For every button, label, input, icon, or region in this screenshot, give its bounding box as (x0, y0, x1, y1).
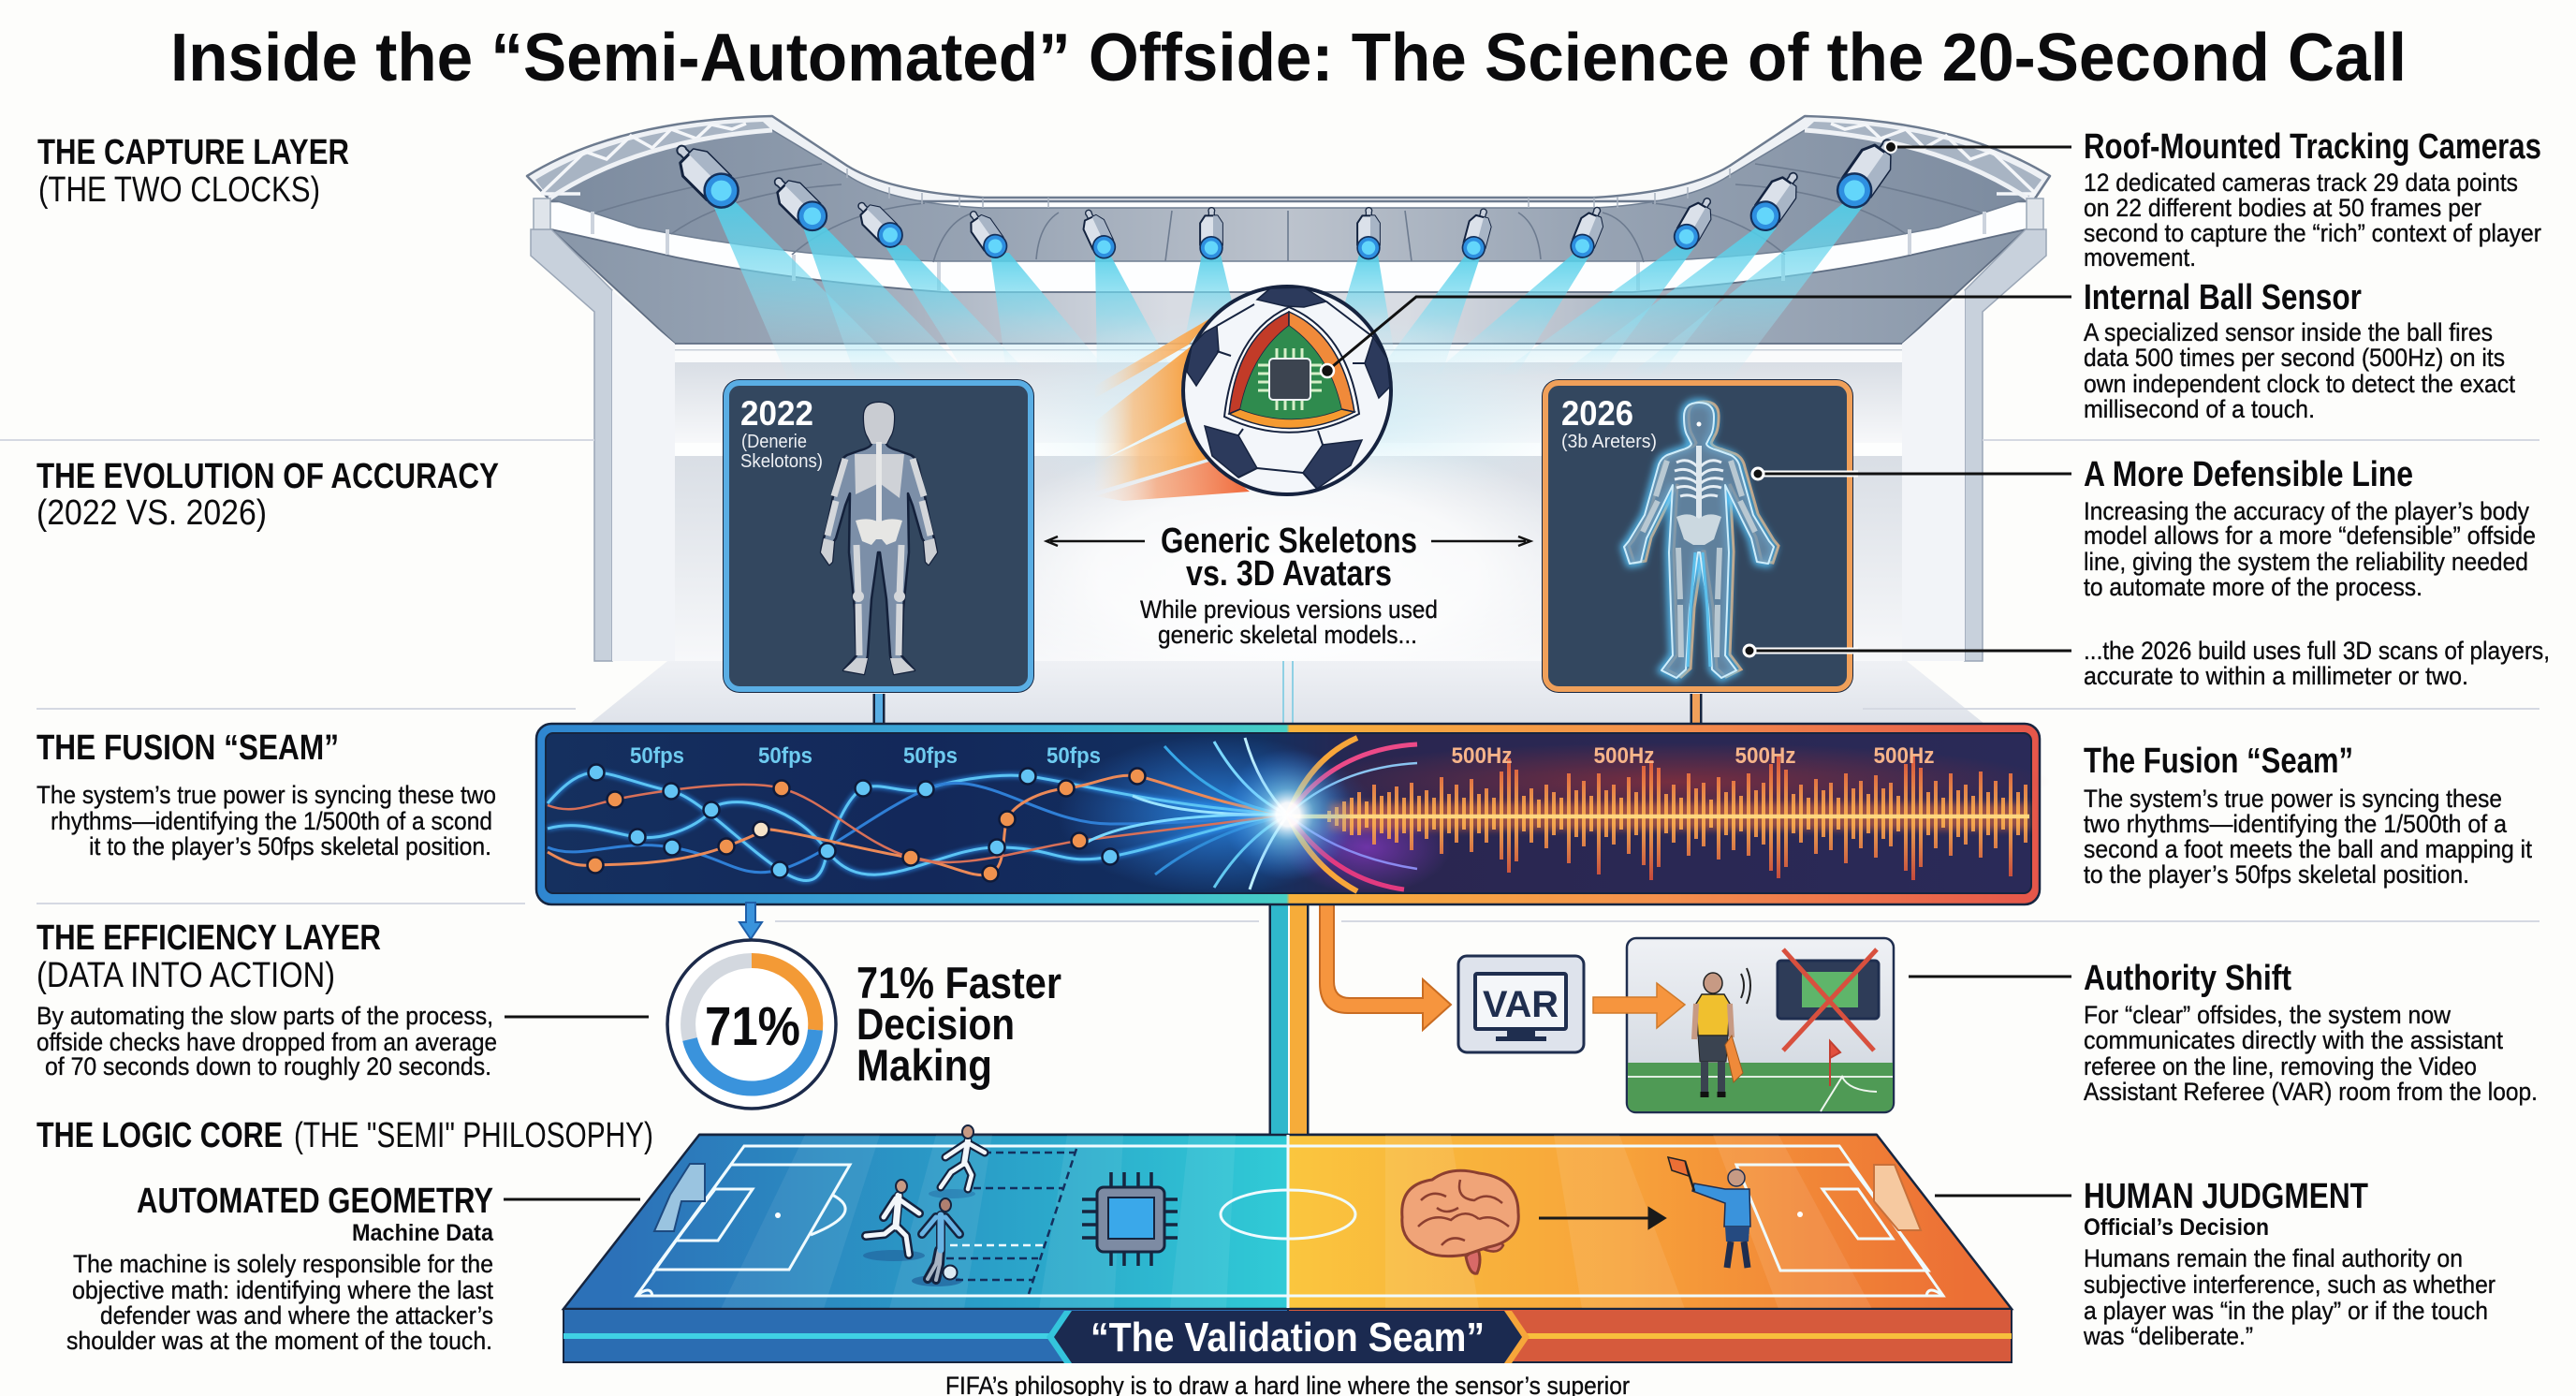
camera 12 (1831, 131, 1903, 213)
text: the fusion seam (right): second a foot meets the ball and mapping it (2084, 835, 2532, 863)
flash at seam (1222, 749, 1354, 880)
seam vertical bars (699, 899, 1877, 1137)
text: the fusion seam (left): rhythms—identifying the 1/500th of a scond (51, 807, 492, 835)
plaque: the validation seam: “The Validation Seam” (1090, 1315, 1485, 1360)
panel: fusion seam visual (536, 724, 2050, 904)
connector 2022 (875, 694, 883, 727)
label: 3D avatars: (3b Areters) (1561, 432, 1657, 452)
pitch markings (637, 1135, 1943, 1309)
text: the efficiency layer: (DATA INTO ACTION) (37, 956, 335, 995)
text: internal ball sensor: own independent clock to detect the exact (2084, 370, 2515, 398)
arrow: brain to official (1539, 1209, 1664, 1227)
text: roof-mounted tracking cameras: 12 dedicated cameras track 29 data points (2084, 169, 2518, 197)
text: the fusion seam (right): The system’s true power is syncing these (2084, 785, 2502, 813)
text: human judgment: subjective interference, such as whether (2084, 1271, 2496, 1299)
labels: 50fps: 50fps (903, 743, 958, 769)
text: 2026 build note: accurate to within a millimeter or two. (2084, 662, 2468, 690)
label: 2026: 2026 (1561, 394, 1633, 433)
connector 2026 (1692, 694, 1700, 727)
figure: attacker upper (941, 1125, 985, 1189)
camera 10 (1670, 193, 1719, 253)
camera 5 (1076, 206, 1119, 262)
text: internal ball sensor: A specialized sensor inside the ball fires (2084, 318, 2493, 346)
label: generic skeletons: Skelotons) (740, 451, 823, 472)
camera 7 (1357, 208, 1380, 259)
text: automated geometry: defender was and where the attacker’s (100, 1301, 493, 1330)
text: authority shift: referee on the line, removing the Video (2084, 1052, 2477, 1080)
text: the efficiency layer: THE EFFICIENCY LAYER (37, 918, 381, 958)
text: human judgment: a player was “in the play” or if the touch (2084, 1297, 2488, 1325)
text: human judgment (2083, 1177, 2496, 1350)
icon: football with sensor chip (1183, 287, 1391, 494)
camera 2 (766, 169, 832, 236)
figure: assistant referee (1694, 968, 1750, 1097)
text: a more defensible line: to automate more of the process. (2084, 573, 2422, 601)
camera 8 (1460, 206, 1495, 261)
pitch right half: human (1288, 1135, 2012, 1309)
panel: 2022 generic skeleton (723, 379, 1034, 693)
player shadows (863, 1250, 925, 1261)
text: a more defensible line (2084, 455, 2536, 601)
labels: 50fps (630, 743, 1101, 769)
arrow: to 2026 panel (1431, 536, 1530, 546)
text: internal ball sensor: data 500 times per second (500Hz) on its (2084, 344, 2505, 372)
nodes: camera frames (588, 764, 1146, 882)
icon: brain (1402, 1170, 1518, 1273)
text: human judgment: HUMAN JUDGMENT (2084, 1177, 2368, 1216)
offside line and dashed projections (946, 1149, 1076, 1294)
text: the efficiency layer (37, 918, 497, 1080)
text: automated geometry: objective math: identifying where the last (72, 1276, 493, 1304)
burst: converging lines at seam (1086, 738, 1417, 891)
heading: the capture layer: THE CAPTURE LAYER (37, 133, 349, 172)
connectors: panels to fusion bar (879, 694, 1696, 727)
labels: 50fps: 50fps (758, 743, 812, 769)
camera 9 (1568, 203, 1608, 261)
camera 6 (1200, 208, 1222, 259)
heading: the logic core: THE LOGIC CORE (37, 1116, 283, 1155)
waves: 50fps (548, 772, 1288, 881)
text: 71% faster decision making: 71% Faster (856, 958, 1061, 1007)
text: a more defensible line: model allows for a more “defensible” offside (2084, 522, 2536, 550)
text: authority shift: Authority Shift (2084, 959, 2291, 998)
text: authority shift: communicates directly with the assistant (2084, 1026, 2503, 1054)
panel: pitch, the logic core (564, 1125, 2012, 1363)
text: the fusion seam (right): The Fusion “Seam” (2084, 742, 2353, 781)
text: authority shift: For “clear” offsides, the system now (2084, 1001, 2451, 1029)
title: Inside the “Semi-Automated” Offside: The Science of the 20-Second Call (170, 21, 2407, 96)
text: the fusion seam (left): THE FUSION “SEAM” (37, 728, 339, 768)
text: human judgment: Humans remain the final authority on (2084, 1244, 2463, 1272)
text: 2026 build note (2084, 637, 2550, 690)
label: VAR: VAR (1483, 984, 1559, 1025)
text: roof-mounted tracking cameras: second to capture the “rich” context of player (2084, 219, 2541, 247)
text: the efficiency layer: of 70 seconds down to roughly 20 seconds. (45, 1052, 491, 1080)
text: the efficiency layer: By automating the slow parts of the process, (37, 1002, 493, 1030)
text: internal ball sensor (2084, 278, 2515, 423)
leader line: ball sensor (1321, 297, 2071, 377)
text: automated geometry: AUTOMATED GEOMETRY (137, 1182, 493, 1221)
pitch front edge (564, 1309, 2012, 1362)
text: automated geometry: The machine is solely responsible for the (73, 1250, 493, 1278)
text: automated geometry: shoulder was at the moment of the touch. (66, 1327, 492, 1355)
callout: generic skeletons vs 3D avatars: vs. 3D Avatars (1186, 554, 1392, 594)
light beams from cameras (711, 201, 1865, 712)
text: the fusion seam (right): to the player’s 50fps skeletal position. (2084, 860, 2469, 889)
label: 2022: 2022 (740, 394, 813, 433)
callout: generic skeletons vs 3D avatars: generic skeletal models... (1158, 621, 1417, 649)
callout: generic skeletons vs 3D avatars (1140, 522, 1438, 649)
text: the fusion seam (left): it to the player’s 50fps skeletal position. (89, 832, 491, 860)
labels: 500Hz: 500Hz (1735, 743, 1795, 769)
arrow: to 2022 panel (1046, 536, 1145, 546)
leader lines: side labels (504, 977, 2071, 1199)
text: automated geometry (66, 1182, 494, 1355)
heading: the evolution of accuracy (37, 457, 499, 533)
icon: crossed-out screen (1778, 949, 1879, 1051)
icon: ball speed flames (1095, 318, 1250, 501)
text: human judgment: was “deliberate.” (2083, 1322, 2253, 1350)
icon: left goal (654, 1164, 705, 1231)
seam centre line above fusion bar (1283, 661, 1293, 724)
camera 1 (666, 136, 745, 214)
camera 11 (1746, 165, 1807, 236)
labels: 500Hz (1451, 743, 1934, 769)
labels: 50fps: 50fps (1046, 743, 1101, 769)
waveform: 500Hz (1292, 755, 2029, 880)
label: generic skeletons: (Denerie (741, 432, 807, 452)
callout: generic skeletons vs 3D avatars: While previous versions used (1140, 595, 1438, 624)
gauge: 71 percent (667, 940, 836, 1109)
arrow: VAR to assistant referee (1593, 983, 1685, 1028)
labels: 500Hz: 500Hz (1451, 743, 1513, 769)
text: 71% faster decision making: Decision (856, 999, 1015, 1049)
arrow: fusion to VAR (authority shift) (1320, 899, 1451, 1030)
text: 71% faster decision making: Making (856, 1040, 992, 1090)
heading: the logic core: (THE "SEMI" PHILOSOPHY) (294, 1116, 653, 1155)
leader line: defensible line (1752, 468, 2071, 479)
text: a more defensible line: A More Defensible Line (2084, 455, 2413, 494)
labels: 500Hz: 500Hz (1874, 743, 1934, 769)
callout: generic skeletons vs 3D avatars: Generic Skeletons (1161, 522, 1417, 561)
text: authority shift (2084, 959, 2538, 1106)
icon: corner flag (1830, 1041, 1840, 1086)
heading: the logic core (37, 1116, 653, 1155)
text: the efficiency layer: offside checks have dropped from an average (37, 1028, 497, 1056)
leader line: 3D scans (1744, 645, 2071, 656)
text: automated geometry: Machine Data (352, 1220, 494, 1246)
text: a more defensible line: line, giving the system the reliability needed (2084, 548, 2528, 576)
camera 3 (851, 196, 907, 252)
text: internal ball sensor: Internal Ball Sensor (2084, 278, 2362, 317)
labels: 500Hz: 500Hz (1593, 743, 1655, 769)
icon: chip (1082, 1172, 1178, 1266)
text: a more defensible line: Increasing the accuracy of the player’s body (2084, 497, 2529, 525)
text: the fusion seam (left): The system’s true power is syncing these two (37, 781, 496, 809)
value: 71% (705, 996, 800, 1057)
text: the fusion seam (right): two rhythms—identifying the 1/500th of a (2084, 810, 2508, 838)
text: 71% faster decision making (856, 958, 1061, 1090)
heading: the capture layer (37, 133, 349, 210)
label: generic skeletons (740, 432, 823, 472)
floor (590, 661, 1984, 724)
figure: 3D avatar (1624, 402, 1778, 678)
heading: the capture layer: (THE TWO CLOCKS) (38, 170, 320, 210)
arrow: fusion to efficiency gauge (739, 903, 762, 939)
figure: defender with ball (922, 1198, 959, 1280)
illustration: stadium structure and roof (527, 116, 2050, 662)
icon: VAR monitor (1458, 956, 1584, 1052)
figure: generic skeleton (821, 403, 937, 674)
labels: 50fps: 50fps (630, 743, 684, 769)
text: human judgment: Official’s Decision (2084, 1214, 2269, 1241)
text: internal ball sensor: millisecond of a touch. (2084, 395, 2315, 423)
figure: linesman with flag (1668, 1157, 1750, 1268)
panel: assistant referee, VAR removed (1627, 938, 1894, 1112)
text: the fusion seam (left) (37, 728, 496, 860)
icon: right goal (1874, 1165, 1921, 1230)
text: roof-mounted tracking cameras (2084, 127, 2541, 272)
figure: attacker lower (866, 1180, 919, 1255)
text: the fusion seam (right) (2084, 742, 2532, 889)
text: roof-mounted tracking cameras: movement. (2084, 243, 2196, 272)
heading: the evolution of accuracy: THE EVOLUTION OF ACCURACY (37, 457, 499, 496)
panel: 2026 3D avatar (1542, 379, 1853, 693)
text: authority shift: Assistant Referee (VAR) room from the loop. (2084, 1078, 2538, 1106)
leader line: cameras (1885, 141, 2071, 153)
text: roof-mounted tracking cameras: on 22 different bodies at 50 frames per (2084, 194, 2481, 222)
pitch left half: automated (564, 1135, 1288, 1309)
camera 4 (962, 206, 1011, 262)
heading: the evolution of accuracy: (2022 VS. 2026) (37, 493, 267, 533)
